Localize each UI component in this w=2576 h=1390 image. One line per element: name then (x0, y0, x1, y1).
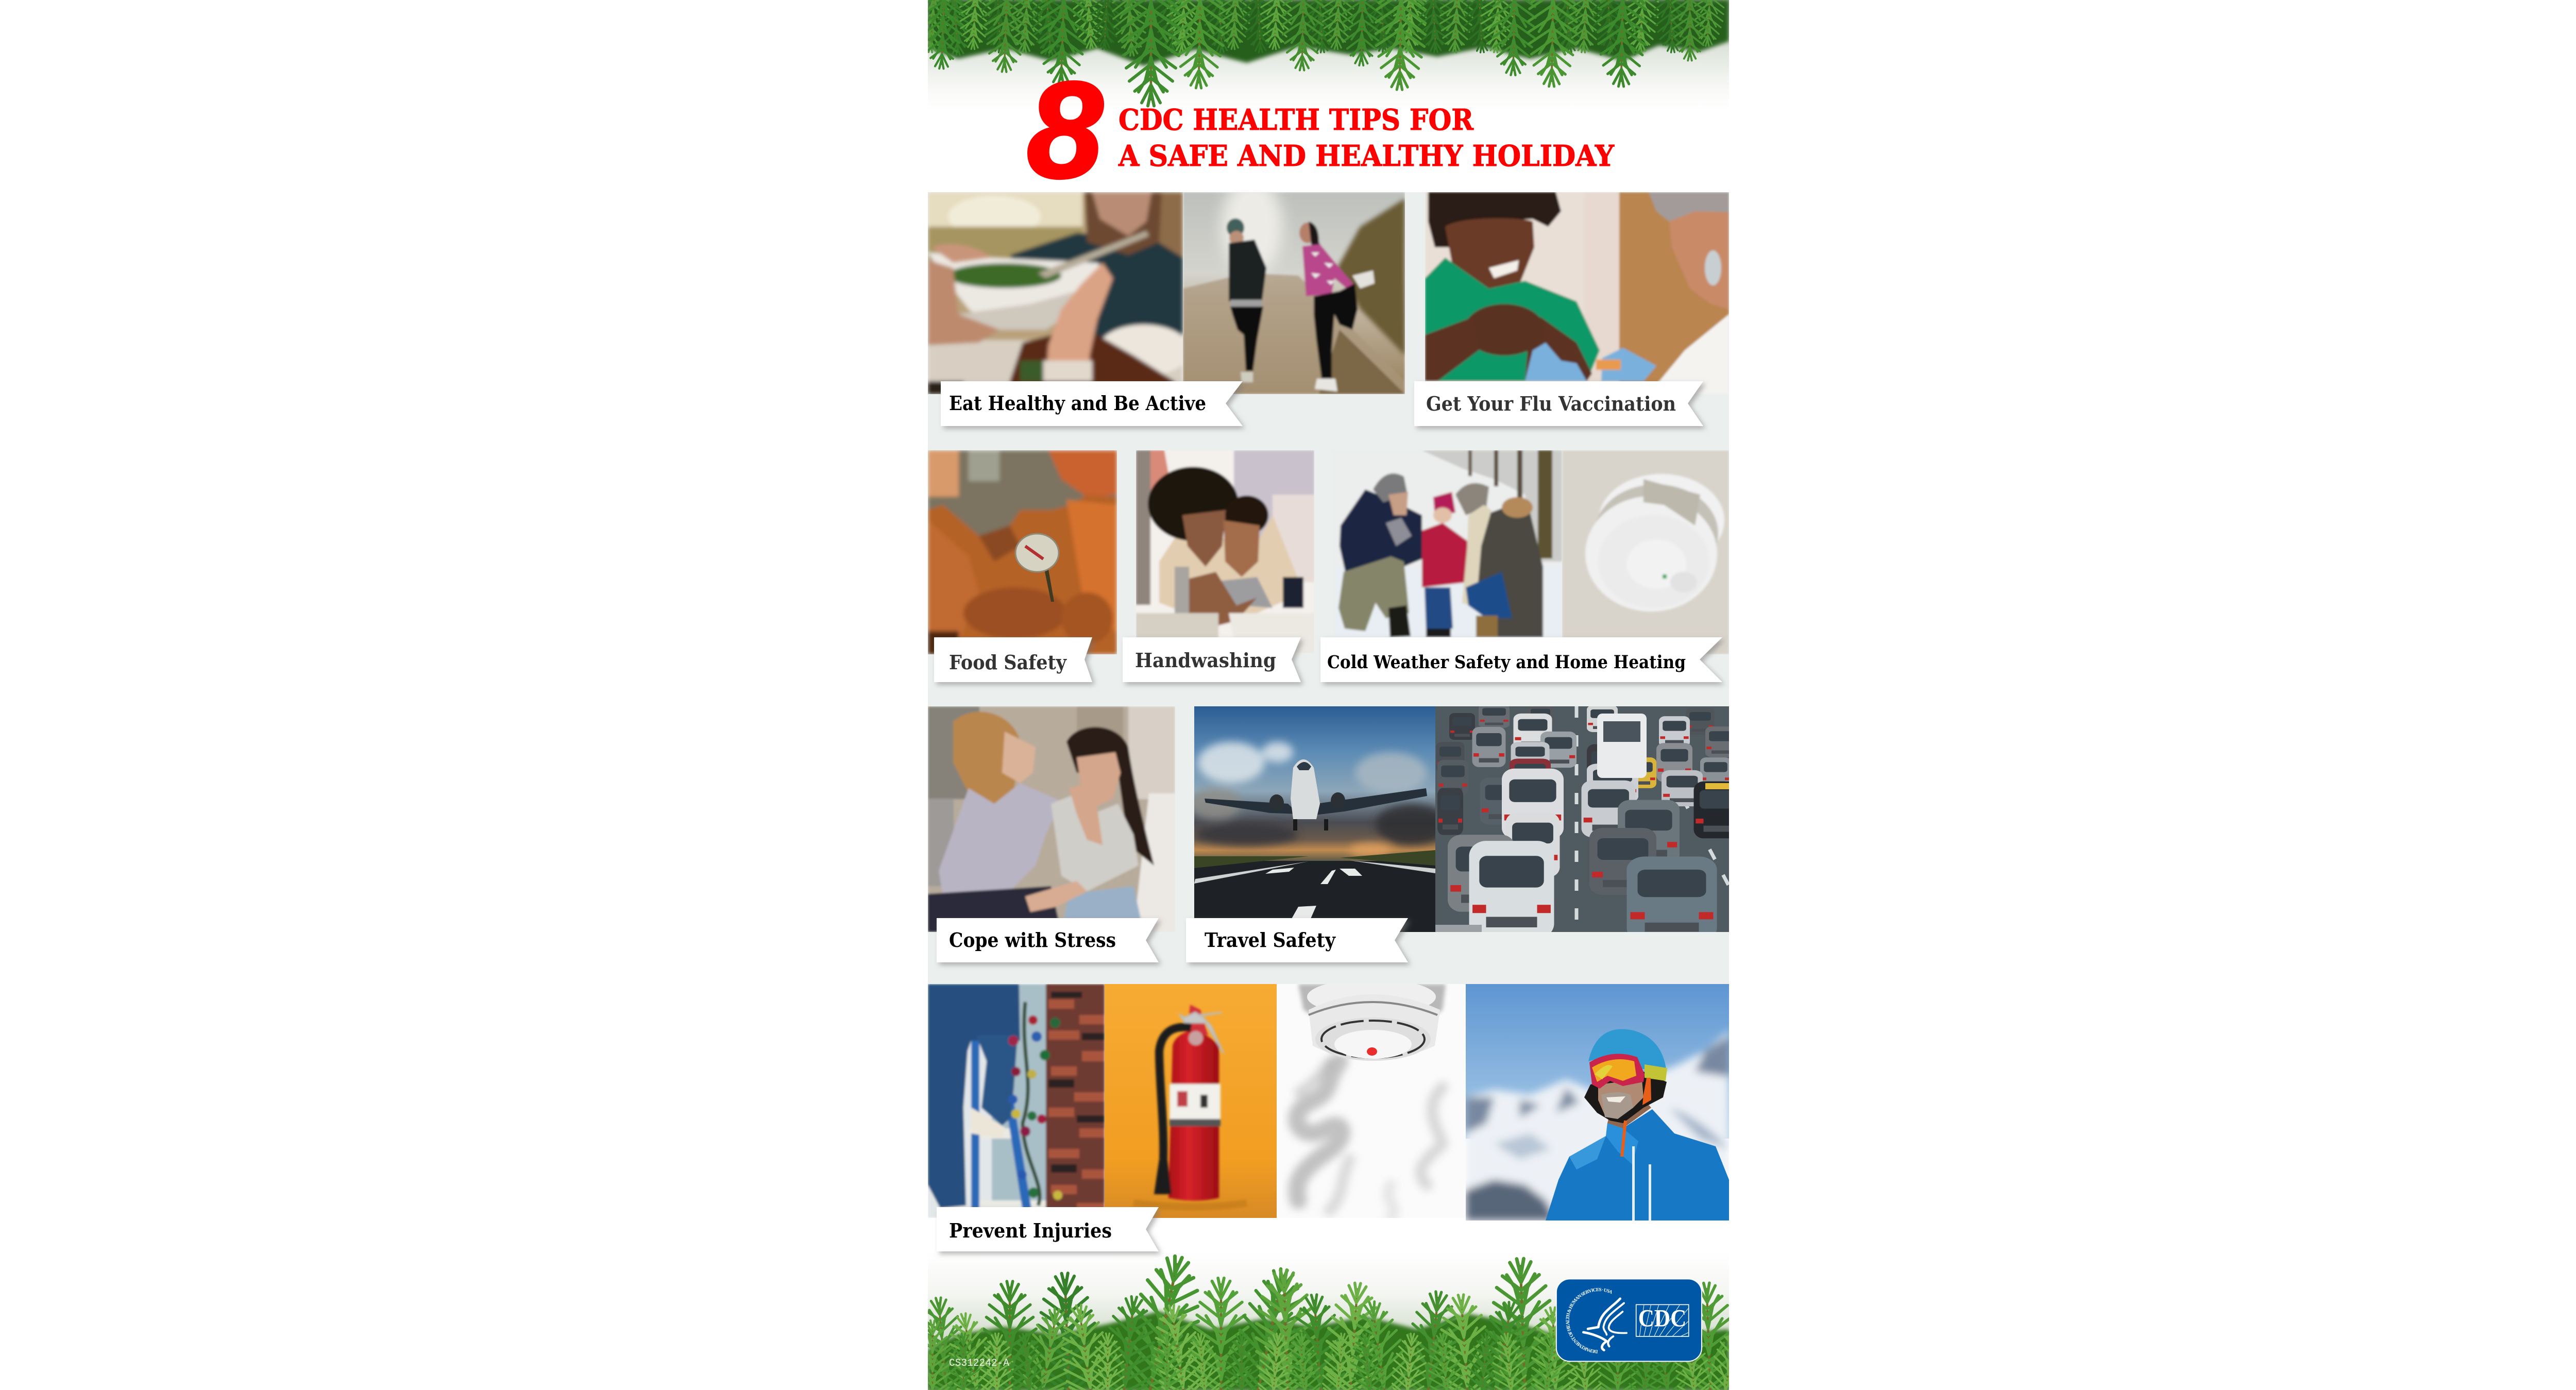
label: Food Safety (934, 637, 1092, 682)
label: Cold Weather Safety and Home Heating: Cold Weather Safety and Home Heating (1327, 652, 1686, 673)
photo: turkey with meat thermometer (928, 450, 1117, 654)
label: Eat Healthy and Be Active (941, 381, 1243, 426)
photo: family in snow (1334, 450, 1562, 654)
label: Prevent Injuries (937, 1207, 1159, 1251)
photo: smoke alarm with smoke (1277, 979, 1466, 1218)
airplane (1205, 759, 1427, 830)
logo: HHS and CDC (1556, 1279, 1702, 1362)
photo: mother and daughter handwashing (1136, 450, 1314, 653)
photo: woman getting flu shot (1425, 192, 1729, 394)
label: Eat Healthy and Be Active: Eat Healthy and Be Active (949, 392, 1206, 415)
label: Food Safety: Food Safety (949, 651, 1067, 674)
photo: woman comforting stressed friend (928, 706, 1175, 932)
label: Cold Weather Safety and Home Heating (1320, 637, 1722, 682)
photo: skier with helmet and goggles (1466, 984, 1729, 1221)
HHS eagle (1583, 1299, 1626, 1350)
HHS circular text: DEPARTMENT OF HEALTH & HUMAN SERVICES · USA (1566, 1288, 1612, 1353)
big red numeral 8: 8 (1027, 54, 1104, 207)
label: Cope with Stress (937, 918, 1159, 962)
CDC box: CDC (1638, 1306, 1686, 1332)
label: Cope with Stress: Cope with Stress (949, 928, 1116, 952)
photo: airplane over runway (1190, 706, 1448, 932)
label: Get Your Flu Vaccination: Get Your Flu Vaccination (1426, 392, 1676, 415)
pine garland: bottom (913, 1250, 1753, 1390)
photo: carbon monoxide alarm (1562, 450, 1729, 654)
title line 1: CDC HEALTH TIPS FOR (1118, 103, 1473, 137)
pine garland: top (914, 0, 1729, 111)
photo: fire extinguisher (1105, 984, 1277, 1218)
label: Prevent Injuries: Prevent Injuries (949, 1219, 1112, 1242)
photo: man hanging holiday lights on ladder (928, 984, 1105, 1218)
label: Travel Safety (1186, 918, 1408, 962)
title line 2: A SAFE AND HEALTHY HOLIDAY (1118, 139, 1615, 173)
photo: two women stretching outdoors (1183, 178, 1405, 394)
label: Travel Safety: Travel Safety (1205, 928, 1336, 952)
label: Handwashing: Handwashing (1135, 649, 1276, 672)
photo: highway traffic (1435, 704, 1742, 942)
photo: serving green beans (928, 192, 1190, 394)
label: Handwashing (1123, 637, 1301, 682)
label: Get Your Flu Vaccination (1414, 381, 1703, 426)
publication code: CS312242-A (949, 1358, 1009, 1369)
title (1027, 54, 1615, 207)
